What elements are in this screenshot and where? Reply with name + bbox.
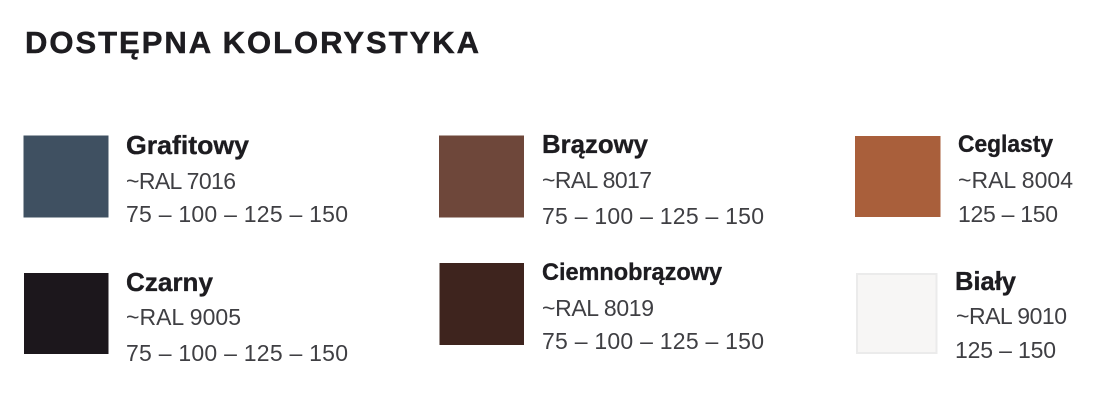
colour: Biały: [857, 266, 1067, 363]
RAL 9005: ~RAL 9005: [126, 304, 241, 330]
sizes: Grafitowy: 75 – 100 – 125 – 150: [126, 201, 348, 227]
name: Biały: Biały: [955, 266, 1017, 296]
sizes: Ceglasty: 125 – 150: [958, 201, 1058, 227]
RAL 9010: ~RAL 9010: [956, 303, 1067, 329]
name: Brązowy: Brązowy: [542, 129, 649, 159]
name: Grafitowy: Grafitowy: [126, 130, 250, 160]
title: DOSTĘPNA KOLORYSTYKA: [25, 25, 479, 60]
name: Ceglasty: Ceglasty: [958, 131, 1054, 158]
RAL 8004: ~RAL 8004: [958, 167, 1073, 193]
RAL 7016: ~RAL 7016: [126, 168, 236, 194]
sizes: Czarny: 75 – 100 – 125 – 150: [126, 340, 348, 366]
name: Ciemnobrązowy: Ciemnobrązowy: [542, 259, 723, 286]
sizes: Brązowy: 75 – 100 – 125 – 150: [542, 203, 764, 229]
RAL 8017: ~RAL 8017: [542, 167, 652, 193]
RAL 8019: ~RAL 8019: [542, 295, 654, 321]
sizes: Biały: 125 – 150: [955, 337, 1056, 363]
colour: Czarny: [24, 267, 348, 366]
swatch: Ceglasty: [855, 136, 940, 217]
swatch: Biały: [857, 274, 936, 353]
swatch: Grafitowy: [24, 136, 108, 218]
swatch: Czarny: [24, 273, 108, 354]
swatch: Brązowy: [439, 136, 524, 218]
colour: Ciemnobrązowy: [440, 259, 764, 354]
sizes: Ciemnobrązowy: 75 – 100 – 125 – 150: [542, 328, 764, 354]
colour: Grafitowy: [24, 130, 348, 227]
swatch: Ciemnobrązowy: [440, 263, 524, 345]
colour: Ceglasty: [855, 131, 1073, 227]
colour: Brązowy: [439, 129, 764, 229]
name: Czarny: Czarny: [126, 267, 214, 297]
